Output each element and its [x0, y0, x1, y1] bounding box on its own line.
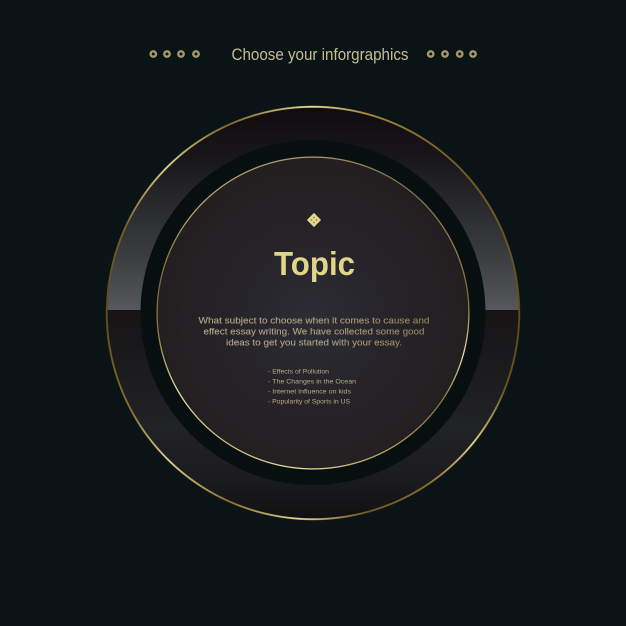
description: effect essay writing. We have collected some good — [204, 326, 424, 338]
description — [198, 316, 430, 349]
left dots — [151, 51, 199, 57]
heading: Choose your inforgraphics — [232, 45, 408, 64]
icon: gold ornament — [307, 213, 321, 227]
title: Topic — [274, 245, 355, 282]
inner gold rim — [156, 156, 470, 470]
topic list — [268, 368, 356, 406]
description: ideas to get you started with your essay. — [226, 338, 402, 349]
description: What subject to choose when it comes to cause and — [198, 316, 430, 326]
ring bands and disc — [108, 108, 518, 512]
topic list: - Internet Influence on kids — [268, 388, 352, 396]
topic list: - The Changes in the Ocean — [268, 378, 356, 386]
header row — [149, 45, 477, 64]
topic list: - Effects of Pollution — [268, 368, 329, 376]
outer gold rim — [105, 105, 521, 521]
circular panel — [106, 106, 520, 520]
right dots — [428, 51, 476, 57]
topic list: - Popularity of Sports in US — [268, 398, 351, 406]
